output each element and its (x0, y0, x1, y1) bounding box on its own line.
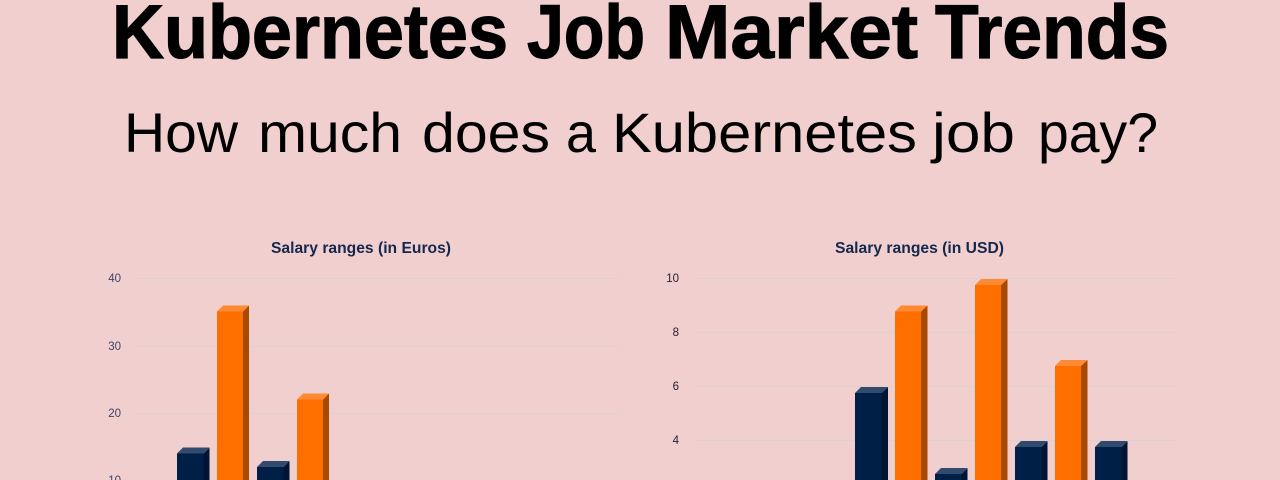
y axis labels: USD: 10 (666, 273, 679, 285)
y axis labels: USD: 8 (673, 327, 679, 339)
y axis labels: Euros: 40 (108, 273, 121, 285)
chart title: Euros: Salary ranges (in Euros) (271, 240, 451, 257)
subtitle: much (258, 101, 402, 164)
chart title: USD: Salary ranges (in USD) (835, 240, 1004, 257)
y axis labels: USD: 6 (673, 381, 679, 393)
y axis labels: Euros (108, 273, 121, 480)
y axis labels: Euros: 20 (108, 408, 121, 420)
y axis labels: USD: 4 (673, 435, 680, 447)
y axis gridlines: Euros (136, 278, 620, 414)
y axis gridlines: USD (694, 278, 1178, 440)
subtitle: pay? (1038, 101, 1158, 164)
subtitle: Kubernetes (612, 101, 917, 164)
panel: salary ranges in Euros chart (108, 240, 620, 480)
bars: Euros (177, 306, 329, 480)
subtitle: How (124, 101, 239, 164)
y axis labels: USD (666, 273, 680, 447)
panel: salary ranges in USD chart (666, 240, 1178, 480)
bars: USD (855, 279, 1128, 480)
subtitle: does (422, 101, 550, 164)
y axis labels: Euros: 30 (108, 341, 121, 353)
subtitle: job (930, 101, 1015, 164)
subtitle: a (566, 101, 597, 164)
